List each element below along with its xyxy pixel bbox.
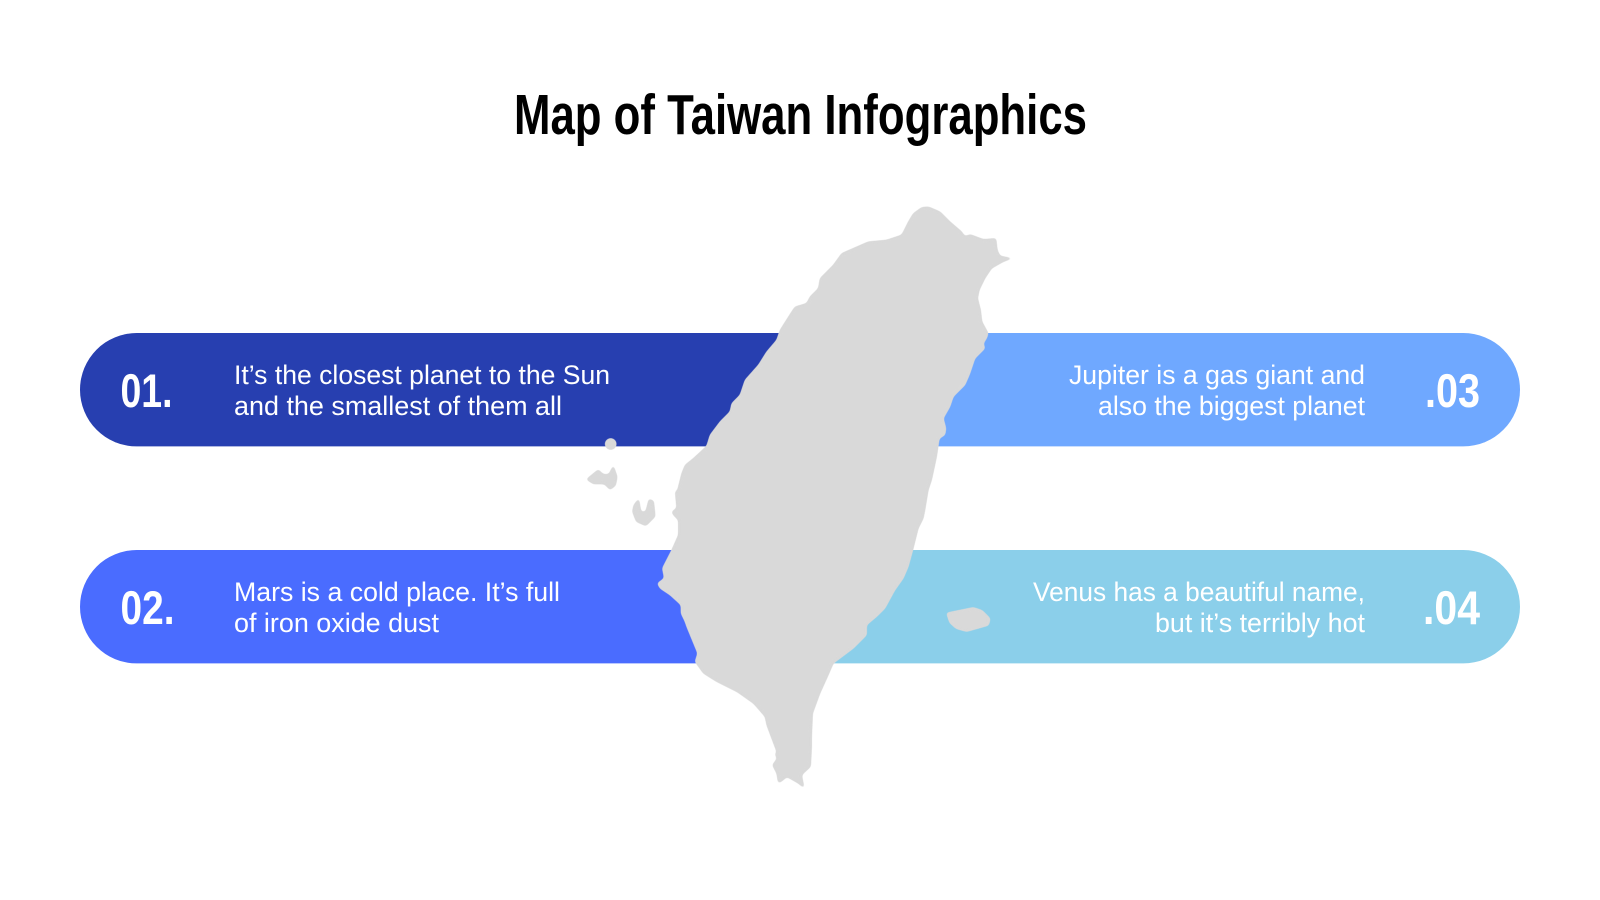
islet: north dot — [605, 438, 617, 450]
text: 04 description: but it’s terribly hot — [1155, 608, 1365, 638]
text: 02 description — [234, 577, 560, 638]
number: 03: .03 — [1425, 364, 1480, 417]
panel: 02 — [80, 550, 820, 663]
text: 04 description: Venus has a beautiful name, — [1033, 577, 1365, 607]
text: 01 description: and the smallest of them all — [234, 391, 562, 421]
text: 01 description: It’s the closest planet to the Sun — [234, 360, 610, 390]
text: 01 description — [234, 360, 610, 421]
main island — [657, 207, 1013, 788]
title: Map of Taiwan Infographics — [514, 83, 1087, 147]
text: 02 description: Mars is a cold place. It’s full — [234, 577, 560, 607]
islet: Penghu west — [586, 464, 618, 490]
text: 02 description: of iron oxide dust — [234, 608, 439, 638]
panel: 04 — [820, 550, 1520, 663]
text: 03 description: Jupiter is a gas giant and — [1069, 360, 1365, 390]
panel: 01 — [80, 333, 820, 446]
number: 04: .04 — [1423, 581, 1480, 634]
number: 02: 02. — [120, 581, 174, 634]
pill: 04 — [820, 550, 1520, 663]
map of Taiwan — [586, 207, 1013, 788]
pill: 03 — [820, 333, 1520, 446]
number: 01: 01. — [120, 364, 172, 417]
islet: Penghu south — [632, 498, 656, 526]
islet: Orchid Island — [946, 607, 991, 632]
text: 03 description: also the biggest planet — [1098, 391, 1365, 421]
text: 03 description — [1069, 360, 1365, 421]
panel: 03 — [820, 333, 1520, 446]
pill: 01 — [80, 333, 820, 446]
pill: 02 — [80, 550, 820, 663]
text: 04 description — [1033, 577, 1365, 638]
